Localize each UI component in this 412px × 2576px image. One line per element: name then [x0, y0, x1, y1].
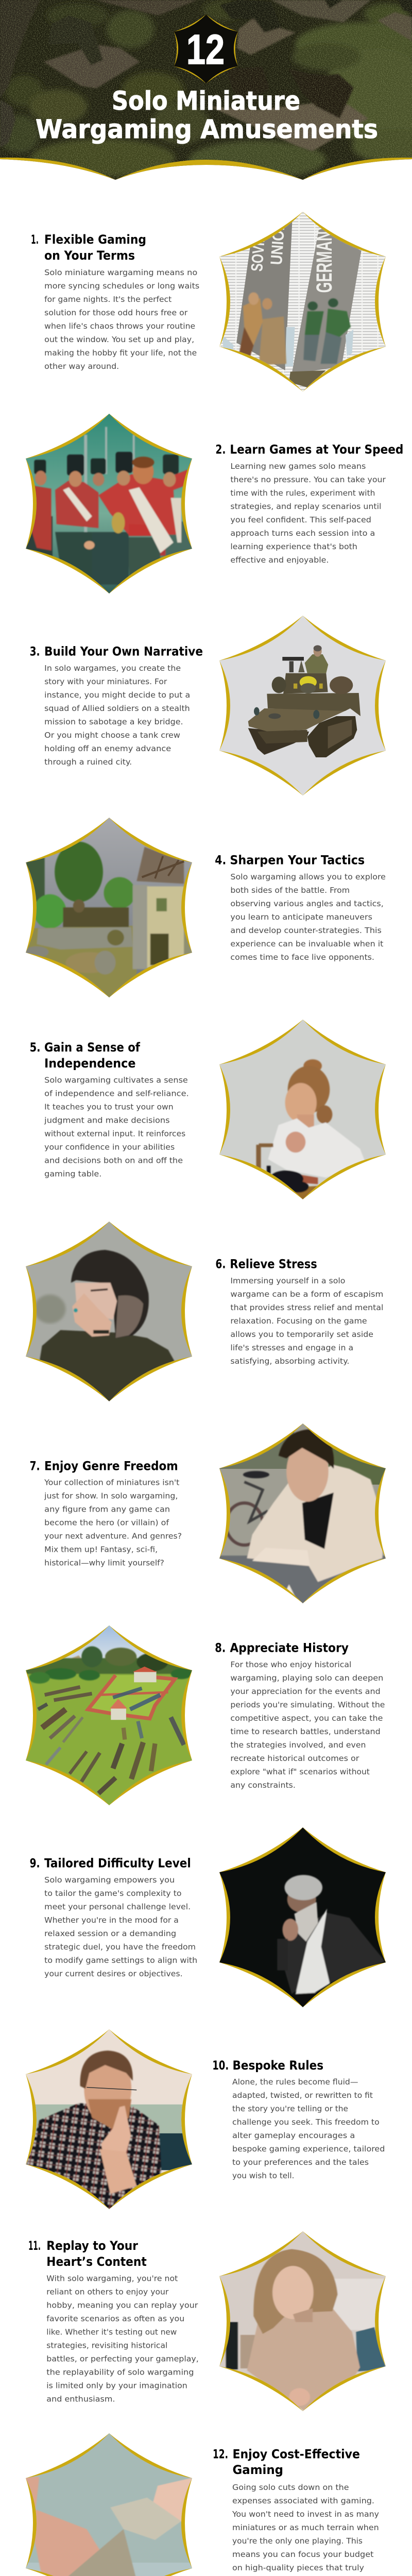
- photo hexagon: army books: [219, 212, 386, 392]
- body text: item 6: relaxation. Focusing on the game: [230, 1316, 367, 1326]
- body text: item 10: [232, 2077, 385, 2180]
- body text: item 6: Immersing yourself in a solo: [230, 1276, 345, 1285]
- panel: item 3 narrative: [30, 613, 391, 799]
- body text: item 4: observing various angles and tactics,: [230, 899, 384, 908]
- body text: item 11: battles, or perfecting your gameplay,: [46, 2354, 199, 2364]
- body text: item 7: your next adventure. And genres?: [44, 1532, 182, 1541]
- body text: item 2: strategies, and replay scenarios until: [230, 502, 381, 511]
- body text: item 8: wargaming, playing solo can deepen: [230, 1673, 383, 1683]
- body text: item 8: any constraints.: [230, 1781, 296, 1790]
- body text: item 3: In solo wargames, you create the: [44, 664, 181, 673]
- body text: item 10: you wish to tell.: [232, 2171, 294, 2180]
- photo hexagon: man at chess table: [219, 1423, 386, 1603]
- body text: item 2: learning experience that's both: [230, 542, 357, 551]
- body text: item 5: judgment and make decisions: [44, 1116, 170, 1125]
- panel: header: [0, 0, 412, 191]
- body text: item 8: competitive aspect, you can take the: [230, 1714, 383, 1723]
- heading: item 3: 3.: [30, 644, 40, 658]
- panel: item 2 learn games: [24, 411, 403, 598]
- heading: item 11: Replay to Your: [46, 2239, 138, 2253]
- body text: item 8: time to research battles, understand: [230, 1727, 381, 1736]
- body text: item 2: [230, 462, 386, 565]
- body text: item 10: adapted, twisted, or rewritten to fit: [232, 2091, 373, 2100]
- body text: item 11: is limited only by your imagination: [46, 2381, 187, 2391]
- heading: item 12: Gaming: [233, 2463, 283, 2477]
- body text: item 8: explore "what if" scenarios without: [230, 1767, 370, 1776]
- panel: item 1 flexible gaming: [31, 206, 394, 398]
- body text: item 8: For those who enjoy historical: [230, 1660, 351, 1669]
- body text: item 9: meet your personal challenge level.: [44, 1902, 191, 1911]
- body text: item 11: strategies, revisiting historical: [46, 2341, 167, 2350]
- body text: item 10: the story you're telling or the: [232, 2104, 348, 2113]
- heading: item 7: 7.: [30, 1459, 40, 1473]
- panel: item 12 cost-effective: [24, 2431, 386, 2576]
- body text: item 7: become the hero (or villain) of: [44, 1518, 169, 1528]
- body text: item 11: and enthusiasm.: [46, 2395, 115, 2404]
- body text: item 7: Your collection of miniatures isn't: [44, 1478, 179, 1487]
- body text: item 4: experience can be invaluable when it: [230, 939, 383, 948]
- body text: item 5: gaming table.: [44, 1170, 101, 1179]
- body text: item 6: allows you to temporarily set aside: [230, 1330, 373, 1339]
- photo hexagon: man with plaid shirt: [24, 2026, 197, 2212]
- photo hexagon: woman in beige sweater: [215, 2227, 394, 2415]
- body text: item 3: Or you might choose a tank crew: [44, 731, 180, 740]
- body text: item 3: squad of Allied soldiers on a stealth: [44, 704, 190, 713]
- panel: item 9 difficulty: [30, 1826, 394, 2015]
- heading: item 5: Gain a Sense of: [44, 1040, 140, 1055]
- body text: item 5: It teaches you to trust your own: [44, 1103, 174, 1112]
- heading: item 11: 11.: [28, 2239, 41, 2253]
- panel: item 6 stress: [24, 1219, 383, 1406]
- heading: item 1: on Your Terms: [44, 248, 135, 263]
- body text: item 1: out the window. You set up and play,: [44, 335, 194, 344]
- heading: item 4: 4.: [215, 853, 226, 868]
- body text: item 3: through a ruined city.: [44, 757, 132, 767]
- heading: item 6: 6.: [215, 1257, 226, 1272]
- heading: item 3: Build Your Own Narrative: [44, 644, 203, 658]
- body text: item 1: making the hobby fit your life, not the: [44, 348, 197, 358]
- body text: item 10: challenge you seek. This freedom to: [232, 2117, 380, 2127]
- body text: item 11: With solo wargaming, you're not: [46, 2274, 178, 2283]
- panel: item 5 independence: [30, 1017, 394, 1207]
- heading: item 11: Heart’s Content: [46, 2255, 147, 2269]
- badge: number 12: [174, 14, 238, 83]
- photo hexagon: bearded man on black: [215, 1826, 394, 2015]
- body text: item 10: alter gameplay encourages a: [232, 2131, 355, 2140]
- body text: item 4: both sides of the battle. From: [230, 886, 350, 895]
- photo hexagon: army books: UNION: [267, 219, 288, 265]
- photo hexagon: tabletop battlefield: [24, 1624, 197, 1810]
- body text: item 4: and develop counter-strategies. This: [230, 926, 382, 935]
- body text: item 12: You won't need to invest in as many: [232, 2510, 379, 2519]
- photo hexagon: woman at chess: [219, 1020, 386, 1199]
- body text: item 5: [44, 1076, 189, 1179]
- heading: item 12: 12.: [213, 2447, 228, 2462]
- photo hexagon: woman covering face: [24, 1219, 197, 1406]
- body text: item 10: Alone, the rules become fluid—: [232, 2077, 358, 2087]
- body text: item 11: hobby, meaning you can replay your: [46, 2301, 198, 2310]
- body text: item 9: to modify game settings to align with: [44, 1956, 197, 1965]
- body text: item 12: you're the only one playing. This: [232, 2536, 363, 2546]
- title: [36, 86, 378, 144]
- badge: number 12: 12: [186, 26, 225, 73]
- panel: item 4 tactics: [24, 816, 386, 1002]
- body text: item 11: favorite scenarios as often as you: [46, 2314, 184, 2324]
- body text: item 8: your appreciation for the events and: [230, 1687, 381, 1696]
- body text: item 5: Solo wargaming cultivates a sense: [44, 1076, 188, 1085]
- body text: item 1: other way around.: [44, 362, 119, 371]
- body text: item 1: more syncing schedules or long waits: [44, 281, 199, 291]
- body text: item 3: mission to sabotage a key bridge.: [44, 717, 183, 726]
- body text: item 1: Solo miniature wargaming means no: [44, 268, 197, 277]
- heading: item 12: [213, 2447, 360, 2477]
- body text: item 2: effective and enjoyable.: [230, 555, 329, 565]
- heading: item 6: Relieve Stress: [230, 1257, 317, 1272]
- photo hexagon: tank model: [216, 613, 391, 799]
- photo hexagon: redcoat soldiers: [24, 411, 197, 598]
- body text: item 11: [46, 2274, 199, 2404]
- heading: item 5: 5.: [30, 1040, 41, 1055]
- body text: item 7: [44, 1478, 182, 1568]
- heading: item 9: Tailored Difficulty Level: [44, 1856, 191, 1870]
- body text: item 6: life's stresses and engage in a: [230, 1343, 353, 1352]
- body text: item 9: your current desires or objectives.: [44, 1969, 183, 1978]
- body text: item 12: means you can focus your budget: [232, 2550, 374, 2559]
- body text: item 11: the replayability of solo wargaming: [46, 2368, 194, 2377]
- photo hexagon: ruined building diorama: [24, 816, 197, 1002]
- body text: item 8: periods you're simulating. Without the: [230, 1700, 385, 1709]
- header scallop: gold edge: [0, 158, 412, 180]
- heading: item 11: [28, 2239, 147, 2269]
- body text: item 12: miniatures or as much terrain when: [232, 2523, 379, 2532]
- body text: item 7: just for show. In solo wargaming,: [44, 1492, 178, 1501]
- body text: item 8: [230, 1660, 385, 1790]
- body text: item 9: to tailor the game's complexity to: [44, 1889, 181, 1898]
- body text: item 7: Mix them up! Fantasy, sci-fi,: [44, 1545, 158, 1554]
- body text: item 11: like. Whether it's testing out new: [46, 2328, 177, 2337]
- body text: item 1: solution for those odd hours free or: [44, 308, 188, 317]
- body text: item 3: instance, you might decide to put a: [44, 690, 190, 700]
- body text: item 5: your confidence in your abilities: [44, 1143, 175, 1152]
- body text: item 5: without external input. It reinforces: [44, 1129, 185, 1139]
- body text: item 2: there's no pressure. You can take your: [230, 475, 386, 484]
- body text: item 8: recreate historical outcomes or: [230, 1754, 359, 1763]
- photo hexagon: army books: GERMANY: [312, 222, 337, 293]
- heading: item 10: Bespoke Rules: [233, 2058, 323, 2073]
- photo hexagon: army books: SOVIET: [247, 226, 269, 272]
- body text: item 9: Solo wargaming empowers you: [44, 1875, 175, 1885]
- photo hexagon: hands with banknotes: [24, 2431, 197, 2576]
- body text: item 11: reliant on others to enjoy your: [46, 2287, 169, 2297]
- body text: item 7: historical—why limit yourself?: [44, 1558, 164, 1568]
- heading: item 1: [31, 232, 146, 263]
- heading: item 4: Sharpen Your Tactics: [230, 853, 365, 868]
- heading: item 5: [30, 1040, 140, 1071]
- body text: item 1: when life's chaos throws your routine: [44, 321, 195, 331]
- body text: item 1: for game nights. It's the perfect: [44, 295, 171, 304]
- body text: item 10: to your preferences and the tales: [232, 2158, 369, 2167]
- heading: item 10: 10.: [212, 2058, 229, 2073]
- body text: item 5: and decisions both on and off the: [44, 1156, 183, 1165]
- body text: item 12: expenses associated with gaming.: [232, 2496, 374, 2505]
- body text: item 2: Learning new games solo means: [230, 462, 366, 471]
- body text: item 9: [44, 1875, 197, 1978]
- body text: item 1: [44, 268, 199, 371]
- body text: item 12: [232, 2483, 386, 2576]
- body text: item 7: any figure from any game can: [44, 1505, 170, 1514]
- panel: item 7 genre freedom: [30, 1421, 394, 1611]
- panel: item 10 bespoke rules: [24, 2026, 385, 2212]
- body text: item 12: on high-quality pieces that truly: [232, 2563, 364, 2572]
- body text: item 6: wargame can be a form of escapism: [230, 1290, 383, 1299]
- body text: item 2: time with the rules, experiment with: [230, 488, 375, 498]
- heading: item 1: Flexible Gaming: [44, 232, 146, 247]
- body text: item 4: comes time to face live opponents.: [230, 953, 374, 962]
- body text: item 6: satisfying, absorbing activity.: [230, 1357, 349, 1366]
- body text: item 2: approach turns each session into a: [230, 529, 375, 538]
- body text: item 8: the strategies involved, and even: [230, 1740, 366, 1750]
- body text: item 4: Solo wargaming allows you to explore: [230, 872, 386, 882]
- body text: item 9: Whether you're in the mood for a: [44, 1916, 179, 1925]
- body text: item 3: holding off an enemy advance: [44, 744, 171, 753]
- body text: item 6: [230, 1276, 383, 1366]
- body text: item 3: story with your miniatures. For: [44, 677, 167, 686]
- body text: item 9: strategic duel, you have the freedom: [44, 1942, 196, 1952]
- heading: item 1: 1.: [31, 232, 39, 247]
- body text: item 9: relaxed session or a demanding: [44, 1929, 176, 1938]
- body text: item 4: [230, 872, 386, 962]
- body text: item 3: [44, 664, 190, 767]
- body text: item 4: you learn to anticipate maneuvers: [230, 912, 372, 922]
- heading: item 8: 8.: [215, 1641, 226, 1655]
- body text: item 10: bespoke gaming experience, tailored: [232, 2144, 385, 2154]
- panel: item 11 replay: [28, 2227, 394, 2415]
- header photo: miniatures on grass: [0, 0, 412, 181]
- body text: item 6: that provides stress relief and mental: [230, 1303, 383, 1312]
- body text: item 12: Going solo cuts down on the: [232, 2483, 349, 2492]
- title: Wargaming Amusements: [36, 114, 378, 144]
- body text: item 2: you feel confident. This self-paced: [230, 515, 371, 524]
- heading: item 8: Appreciate History: [230, 1641, 349, 1655]
- title: Solo Miniature: [112, 86, 300, 116]
- heading: item 9: 9.: [30, 1856, 40, 1870]
- header scallop: white edge: [0, 159, 412, 191]
- heading: item 12: Enjoy Cost-Effective: [233, 2447, 360, 2462]
- panel: item 8 history: [24, 1624, 385, 1810]
- heading: item 7: Enjoy Genre Freedom: [44, 1459, 178, 1473]
- heading: item 2: 2.: [215, 443, 226, 457]
- heading: item 5: Independence: [44, 1056, 136, 1071]
- body text: item 5: of independence and self-reliance.: [44, 1089, 189, 1098]
